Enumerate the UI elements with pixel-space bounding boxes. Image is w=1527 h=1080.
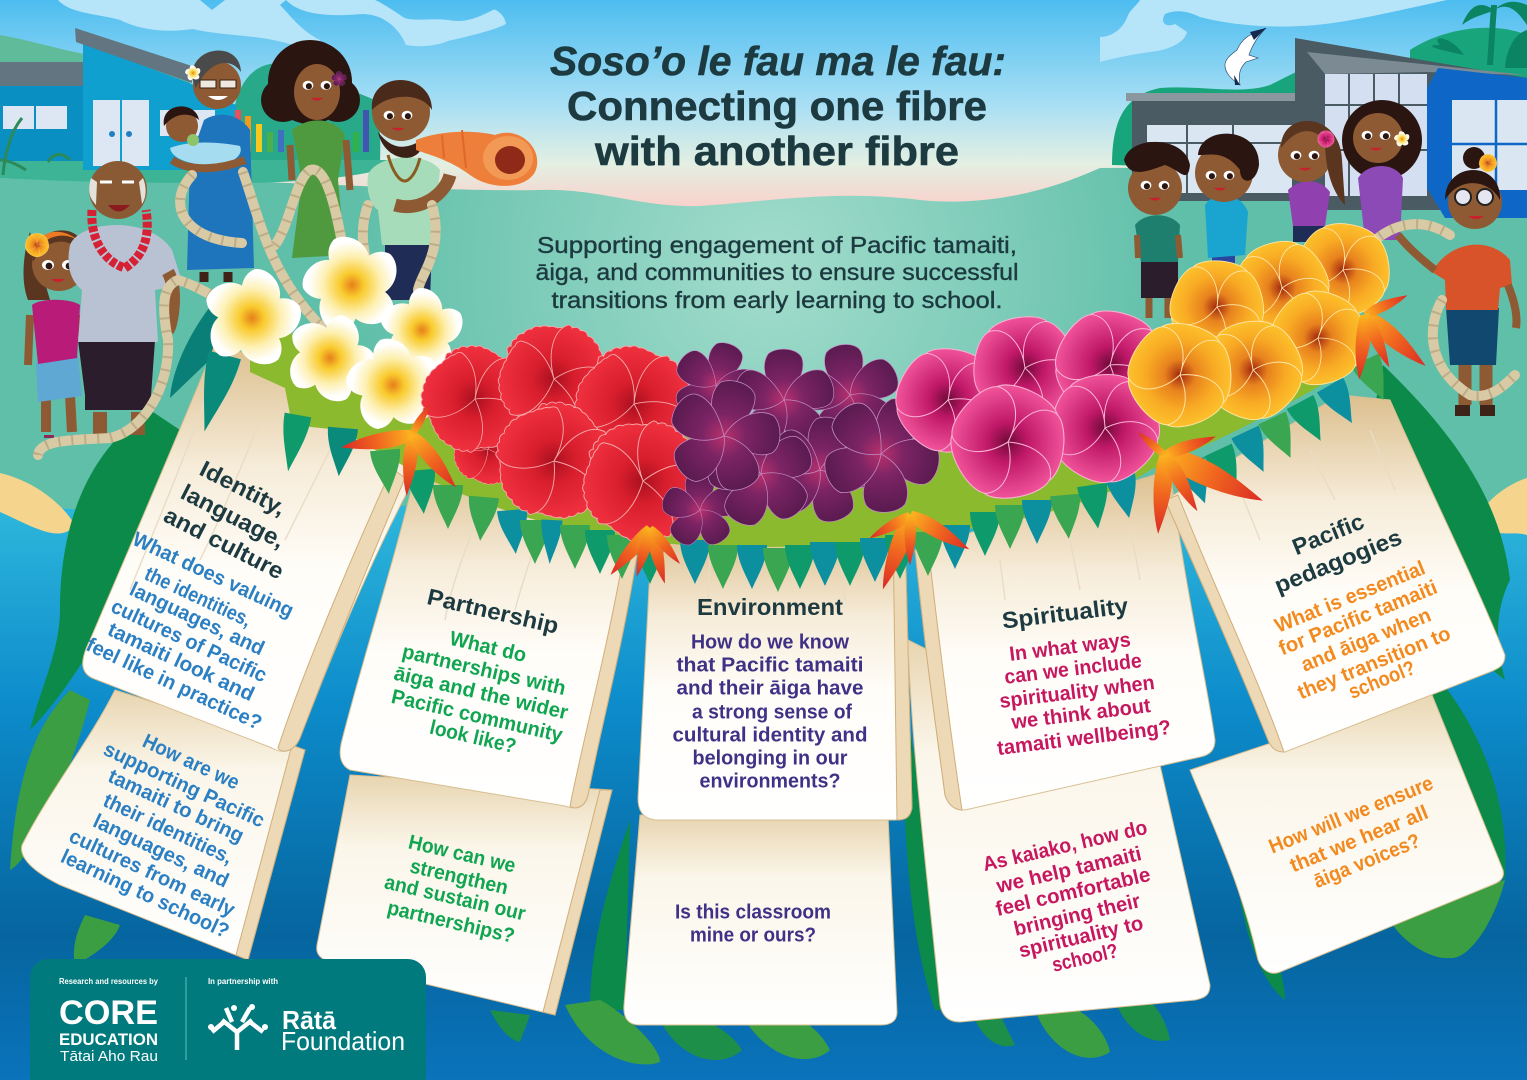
- garland: hanging leaves: [189, 351, 1397, 592]
- question: What does valuing: [129, 528, 297, 622]
- question: cultural identity and: [672, 724, 868, 746]
- question: [83, 528, 297, 735]
- question: cultures of Pacific: [108, 595, 270, 687]
- upper scroll: [638, 530, 912, 820]
- question: [389, 627, 570, 758]
- question: that we hear all: [1287, 801, 1431, 877]
- garland: green band: [250, 330, 1330, 547]
- question: In what ways: [1008, 628, 1132, 666]
- Rātā Foundation logo: Foundation: [281, 1026, 405, 1056]
- title: [550, 38, 1006, 174]
- flowers: white plumeria: [185, 232, 473, 434]
- rope: right garland fibres: [1370, 224, 1515, 396]
- question: and their āiga have: [676, 676, 864, 700]
- person: girl in pink: [24, 230, 88, 438]
- person: girl with curly hair: [1342, 100, 1422, 240]
- CORE Education logo: [59, 977, 159, 1065]
- heading: Identity,: [196, 455, 290, 521]
- Rātā Foundation logo: [208, 977, 405, 1056]
- question: āiga and the wider: [392, 662, 570, 724]
- question: languages, and: [90, 810, 232, 892]
- question: languages, and: [126, 578, 268, 660]
- question: spirituality when: [998, 671, 1156, 713]
- question: How can we: [406, 831, 518, 877]
- question: [1266, 772, 1436, 893]
- question: [57, 730, 268, 943]
- subtitle: [536, 232, 1018, 313]
- CORE Education logo: Research and resources by: [59, 977, 159, 986]
- question: [1272, 556, 1454, 704]
- heading: Environment: [697, 594, 843, 620]
- upper scroll: [340, 462, 640, 808]
- question: As kaiako, how do: [981, 816, 1149, 876]
- question: partnerships with: [400, 640, 568, 700]
- question: school?: [1050, 939, 1120, 977]
- question: tamaiti to bring: [105, 765, 247, 847]
- CORE Education logo: Tātai Aho Rau: [60, 1048, 158, 1065]
- upper scroll: [83, 345, 420, 751]
- question: belonging in our: [692, 746, 848, 770]
- person: grandmother with baby: [164, 50, 254, 282]
- upper scroll: [1165, 395, 1505, 752]
- question: [996, 628, 1172, 760]
- person: boy with backpack: [1195, 134, 1259, 280]
- big leaves behind scrolls: [10, 298, 1510, 1064]
- question: the identities,: [141, 562, 255, 632]
- title: with another fibre: [594, 128, 959, 174]
- question: they transition to: [1294, 622, 1454, 704]
- panel: Spirituality: [908, 470, 1215, 1022]
- person: boy with lei: [1124, 142, 1190, 318]
- question: strengthen: [408, 855, 510, 899]
- beach right: [1478, 478, 1527, 535]
- clouds: [58, 0, 1447, 62]
- flowers: red hibiscus: [403, 309, 734, 574]
- question: bringing their: [1012, 889, 1142, 941]
- subtitle: Supporting engagement of Pacific tamaiti,: [537, 232, 1017, 258]
- panel: Pacific pedagogies: [1165, 395, 1505, 973]
- flowers: orange blossoms: [1108, 215, 1403, 449]
- question: cultures from early: [66, 825, 239, 922]
- divider: [186, 977, 187, 1060]
- lower scroll: [1190, 690, 1503, 973]
- flowers: purple plumeria: [651, 328, 964, 550]
- title: Connecting one fibre: [567, 83, 987, 129]
- palm trees: [1432, 2, 1527, 68]
- question: feel like in practice?: [83, 633, 265, 735]
- question: for Pacific tamaiti: [1275, 576, 1441, 660]
- Rātā Foundation logo: In partnership with: [208, 977, 278, 986]
- question: their identities,: [100, 789, 236, 869]
- person: man blowing conch: [367, 80, 450, 300]
- icon: seagull: [1225, 28, 1266, 85]
- question: feel comfortable: [993, 863, 1153, 921]
- heading: Pacific: [1288, 508, 1368, 560]
- heading: Partnership: [425, 583, 561, 639]
- subtitle: transitions from early learning to school.: [552, 287, 1002, 313]
- panel: Identity, language and culture: [22, 345, 420, 960]
- question: that Pacific tamaiti: [676, 654, 864, 676]
- background hills: [0, 28, 1527, 170]
- question: school?: [1345, 656, 1419, 704]
- rope: left garland fibres: [38, 170, 436, 455]
- title: Soso’o le fau ma le fau:: [550, 38, 1006, 84]
- person: grandfather: [68, 161, 183, 435]
- flowers: bird of paradise: [340, 290, 1432, 593]
- CORE Education logo: EDUCATION: [59, 1031, 158, 1049]
- building: left school: [0, 28, 236, 175]
- heading: language,: [177, 479, 289, 553]
- question: supporting Pacific: [100, 738, 268, 832]
- ground: [0, 165, 1527, 560]
- question: environments?: [700, 770, 840, 792]
- subtitle: āiga, and communities to ensure successful: [536, 259, 1018, 285]
- question: [672, 630, 868, 792]
- question: partnerships?: [385, 896, 517, 948]
- logo panel: [30, 959, 426, 1080]
- question: [675, 900, 831, 946]
- heading: Spirituality: [1000, 592, 1130, 634]
- question: can we include: [1003, 649, 1143, 689]
- lawn shading: [0, 160, 1527, 205]
- question: Is this classroom: [675, 900, 831, 924]
- question: [981, 816, 1153, 977]
- person: girl with purple top: [1278, 121, 1345, 242]
- question: a strong sense of: [692, 700, 852, 724]
- CORE Education logo: CORE: [59, 994, 158, 1032]
- heading: and culture: [160, 502, 288, 584]
- panel: Environment: [624, 530, 912, 1025]
- Rātā Foundation logo: Rātā: [282, 1005, 337, 1035]
- lower scroll: [624, 815, 897, 1025]
- question: learning to school?: [57, 845, 233, 943]
- question: look like?: [428, 716, 518, 758]
- question: tamaiti look and: [104, 618, 258, 706]
- question: we help tamaiti: [993, 842, 1144, 898]
- heading: pedagogies: [1271, 524, 1405, 598]
- question: spirituality to: [1017, 912, 1145, 962]
- lower scroll: [317, 775, 612, 1015]
- lower scroll: [908, 640, 1210, 1022]
- question: mine or ours?: [690, 924, 816, 946]
- question: What is essential: [1272, 556, 1428, 638]
- upper scroll: [915, 470, 1215, 810]
- question: What do: [447, 627, 529, 667]
- person: woman in green: [261, 40, 360, 258]
- question: How are we: [139, 730, 243, 794]
- question: āiga voices?: [1310, 829, 1424, 893]
- flowers: pink hibiscus: [880, 298, 1183, 529]
- beach left: [0, 473, 75, 533]
- question: Pacific community: [389, 685, 565, 747]
- person: teacher: [1398, 147, 1517, 416]
- building: right school: [1126, 38, 1527, 218]
- panel: Partnership: [317, 462, 640, 1015]
- question: tamaiti wellbeing?: [996, 716, 1172, 760]
- question: [382, 831, 528, 948]
- question: we think about: [1009, 694, 1152, 734]
- question: and sustain our: [382, 871, 528, 925]
- sea: [0, 500, 1527, 1080]
- icon: conch shell: [416, 130, 537, 186]
- question: How do we know: [691, 630, 849, 654]
- background: sky: [0, 0, 1527, 210]
- heading: [160, 455, 290, 584]
- coloured fence: [235, 110, 369, 152]
- lower scroll: [22, 690, 305, 960]
- question: How will we ensure: [1266, 772, 1436, 858]
- question: and āiga when: [1298, 603, 1434, 677]
